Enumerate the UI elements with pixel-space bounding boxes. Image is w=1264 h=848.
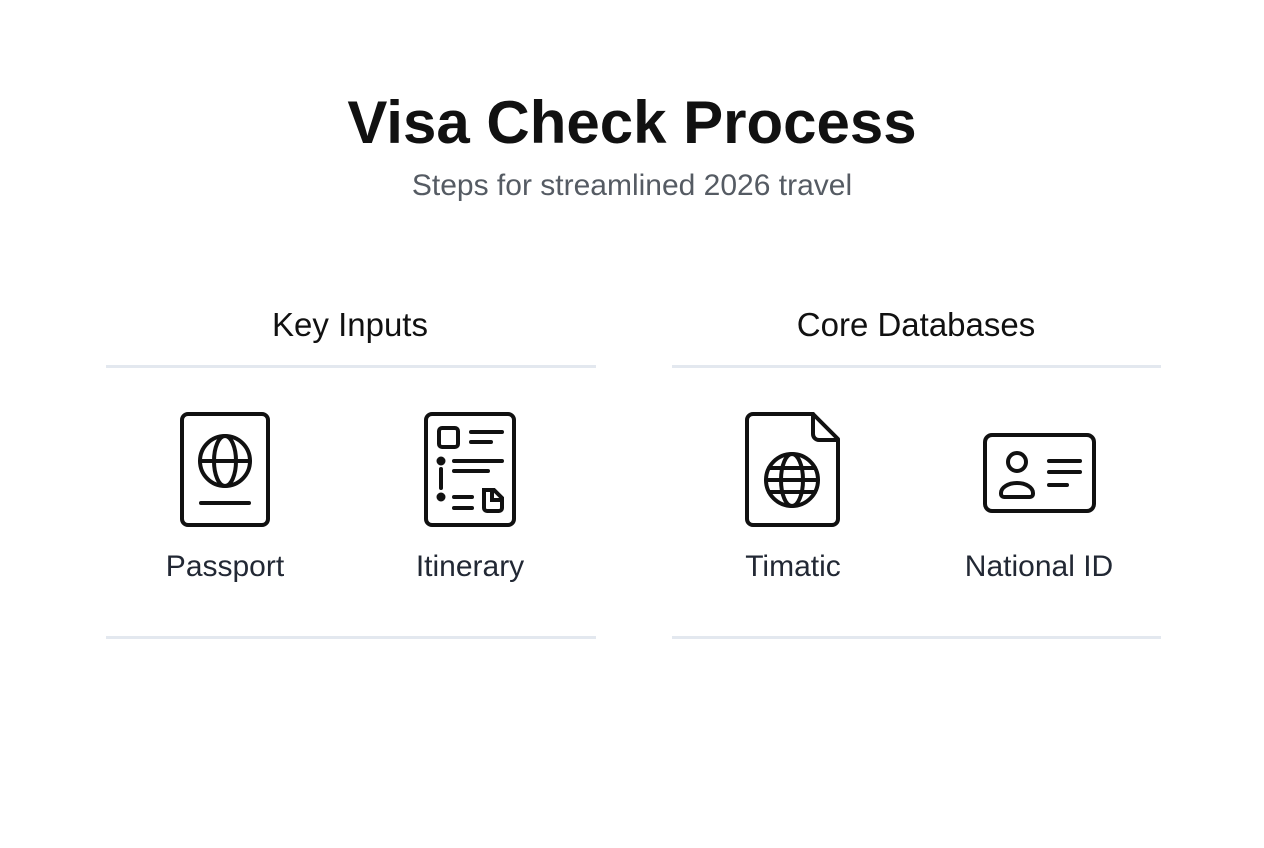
icon: passport [180, 412, 270, 527]
panel: key inputs [106, 306, 596, 639]
icon: itinerary [424, 412, 516, 527]
label: timatic: Timatic [745, 550, 841, 583]
label: national id: National ID [965, 550, 1113, 583]
title: Visa Check Process [347, 89, 917, 156]
icon: national id [983, 433, 1096, 513]
heading: key inputs: Key Inputs [272, 306, 428, 343]
label: passport: Passport [166, 550, 284, 583]
panel: core databases [672, 306, 1161, 639]
label: itinerary: Itinerary [416, 550, 524, 583]
subtitle: Steps for streamlined 2026 travel [412, 169, 852, 202]
icon: timatic [745, 412, 840, 527]
heading: core databases: Core Databases [797, 306, 1035, 343]
